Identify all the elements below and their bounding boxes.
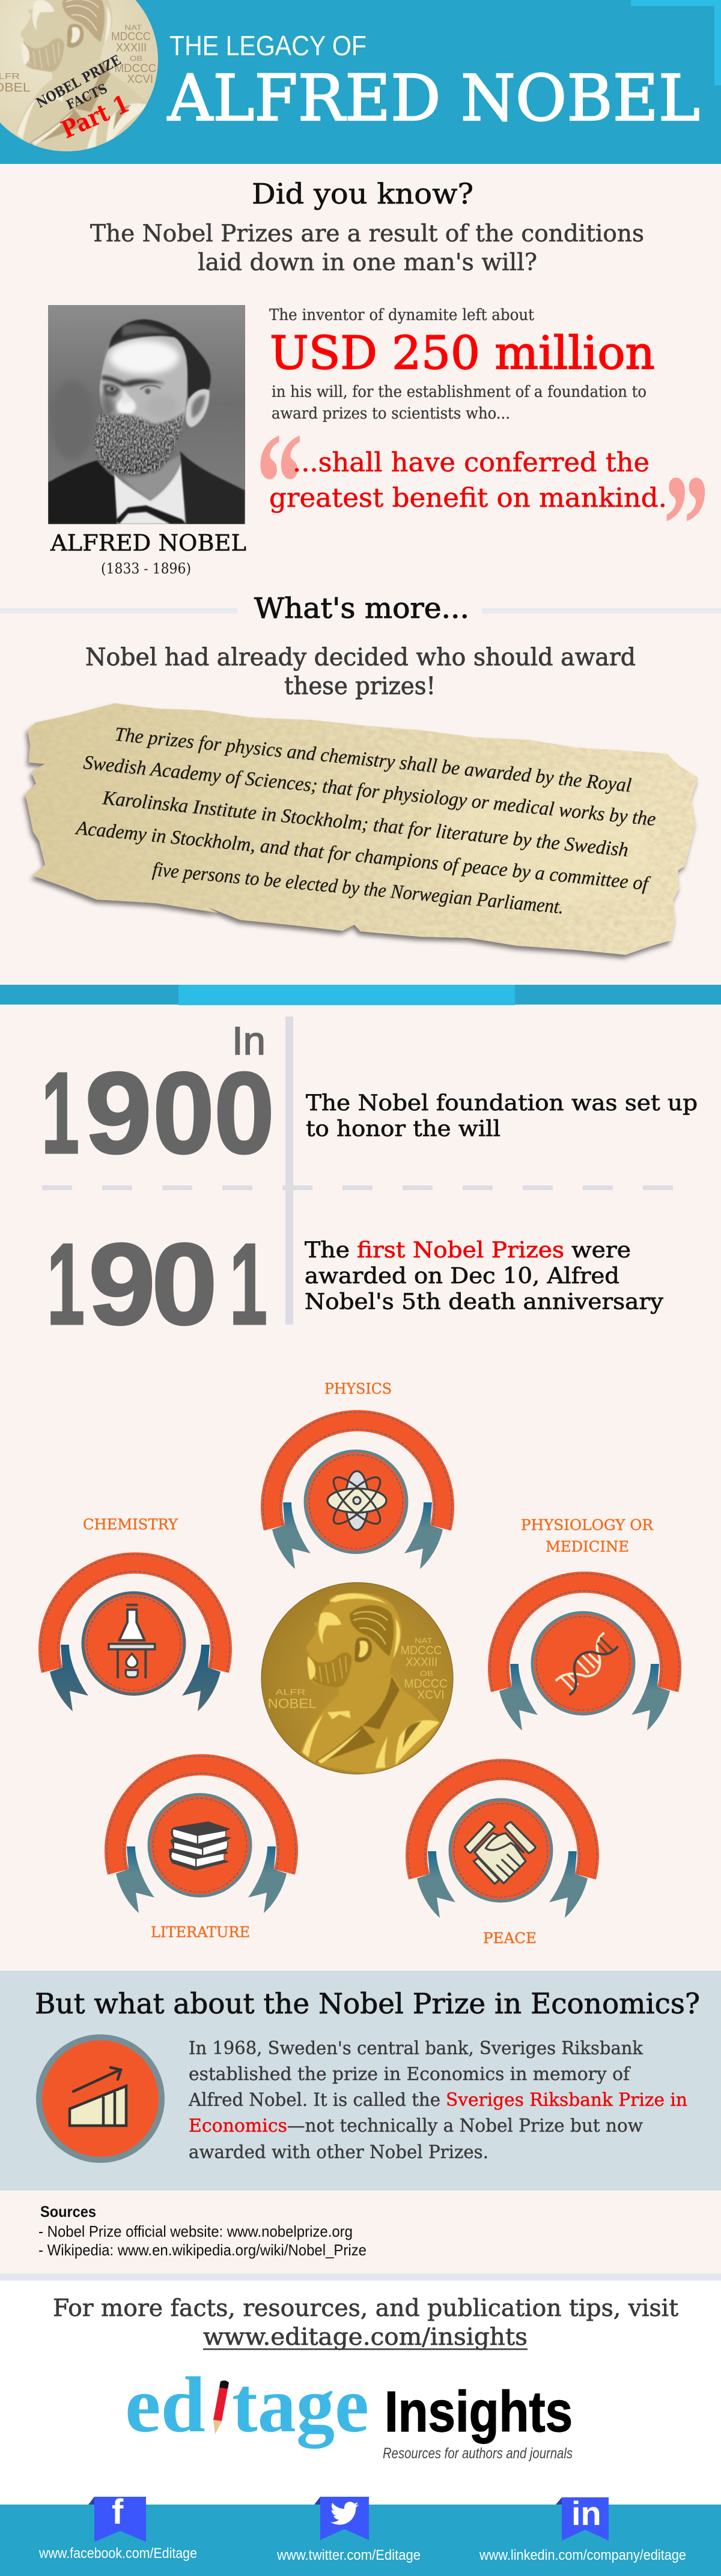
pull quote: greatest benefit on mankind. — [269, 483, 667, 513]
header medal badge: NAT — [124, 25, 142, 32]
economics text: —not technically a Nobel Prize but now — [287, 2115, 643, 2136]
badge: physiology or medicine — [488, 1571, 681, 1731]
pull quote: ...shall have conferred the — [293, 447, 650, 478]
footer links: www.facebook.com/Editage — [38, 2545, 197, 2562]
heading: did you know: Did you know? — [252, 178, 473, 211]
call to action — [53, 2295, 678, 2351]
economics text: established the prize in Economics in memory of — [189, 2064, 631, 2085]
logo: editage insights — [125, 2360, 573, 2462]
economics text: Sveriges Riksbank Prize in — [446, 2090, 687, 2111]
intro text — [90, 220, 644, 276]
portrait caption: ALFRED NOBEL — [50, 530, 246, 556]
icon: linkedin ribbon: in — [571, 2494, 601, 2532]
bequest text block: The inventor of dynamite left about — [269, 306, 535, 324]
intro text: The Nobel Prizes are a result of the conditions — [90, 220, 644, 247]
label: chemistry: CHEMISTRY — [83, 1516, 178, 1533]
gold medal: NOBEL — [268, 1696, 317, 1711]
badge: literature — [105, 1754, 298, 1913]
heading: economics: But what about the Nobel Prize in Economics? — [35, 1988, 700, 2021]
label: physiology or medicine: PHYSIOLOGY OR — [521, 1517, 654, 1534]
divider with heading: what's more: What's more... — [254, 592, 469, 625]
script text: Academy in Stockholm, and that for champions of peace by a committee of — [74, 817, 651, 895]
medal caption: part 1: Part 1 — [57, 89, 133, 144]
gold medal: OB — [420, 1669, 433, 1678]
header kicker: THE LEGACY OF — [169, 30, 367, 61]
label: peace: PEACE — [483, 1930, 537, 1947]
text: 1901 event: Nobel's 5th death anniversary — [305, 1290, 664, 1314]
logo: editage insights: ed — [125, 2360, 205, 2449]
subheading: who should award — [85, 644, 636, 700]
logo: editage insights: tage — [232, 2360, 369, 2449]
gold medal: MDCCC — [401, 1643, 442, 1657]
sources: - Wikipedia: www.en.wikipedia.org/wiki/Nobel_Prize — [38, 2241, 367, 2259]
medal caption: nobel prize facts: NOBEL PRIZE — [34, 52, 124, 111]
icon: DNA helix — [556, 1633, 618, 1695]
icon: linkedin ribbon — [556, 2494, 609, 2541]
icon: flask and burner — [109, 1604, 155, 1678]
economics text: Economics — [189, 2115, 287, 2136]
timeline — [41, 1017, 698, 1349]
call to action: For more facts, resources, and publication tips, visit — [53, 2295, 678, 2322]
gold medal: ALFR — [275, 1687, 305, 1696]
bequest text block — [269, 306, 655, 423]
header medal badge: XXXIII — [116, 41, 147, 54]
economics text: Alfred Nobel. It is called the — [188, 2090, 440, 2111]
badge: peace — [406, 1759, 599, 1918]
portrait caption — [50, 530, 246, 577]
sources: - Nobel Prize official website: www.nobelprize.org — [38, 2222, 353, 2240]
pull quote — [256, 403, 709, 605]
badge: physics — [261, 1410, 454, 1569]
sources: Sources — [40, 2203, 96, 2221]
portrait of Alfred Nobel — [48, 305, 245, 524]
amount callout: USD 250 million — [270, 326, 655, 379]
label: literature: LITERATURE — [151, 1924, 250, 1941]
icon: stack of books — [169, 1821, 231, 1870]
header medal badge — [0, 0, 158, 154]
logo: editage insights: Insights — [385, 2380, 573, 2444]
medal caption: facts: FACTS — [64, 80, 110, 113]
script text: Swedish Academy of Sciences; that for physiology or medical works by the — [82, 752, 657, 830]
year: 1901: 1 — [47, 1219, 85, 1349]
gold medal: XXXIII — [406, 1655, 437, 1669]
year: in 1900: 0 — [153, 1048, 214, 1178]
logo: editage insights: Resources for authors and journals — [383, 2445, 573, 2462]
year: in 1900: 1 — [41, 1048, 79, 1178]
call to action: www.editage.com/insights — [203, 2324, 528, 2351]
icon: facebook ribbon: f — [112, 2493, 124, 2532]
economics text: awarded with other Nobel Prizes. — [189, 2142, 488, 2163]
script text — [74, 724, 657, 918]
text: 1900 event: to honor the will — [306, 1117, 500, 1141]
text: 1901 event: awarded on Dec 10, Alfred — [305, 1264, 619, 1289]
gold medal: NAT — [415, 1637, 433, 1645]
parchment with will excerpt — [25, 703, 698, 955]
icon: opening quote mark: “ — [256, 403, 303, 563]
economics text: In 1968, Sweden's central bank, Sveriges Riksbank — [189, 2038, 643, 2059]
gold medal: MDCCC — [404, 1677, 448, 1690]
icon: pencil — [213, 2380, 229, 2434]
header medal badge: MDCCC — [111, 30, 151, 43]
portrait caption: (1833 - 1896) — [101, 560, 191, 577]
gold medal: XCVI — [417, 1688, 445, 1702]
year: 1901: 0 — [151, 1219, 218, 1349]
subheading: who should award: these prizes! — [284, 673, 436, 700]
year: in 1900: In — [232, 1018, 266, 1063]
sources — [38, 2203, 367, 2259]
icon: growth chart — [39, 2037, 162, 2160]
footer links: www.twitter.com/Editage — [276, 2547, 421, 2563]
intro text: laid down in one man's will? — [198, 249, 537, 276]
year: in 1900: 0 — [214, 1048, 275, 1178]
year: in 1900: 9 — [85, 1048, 152, 1178]
icon: atom — [327, 1471, 386, 1530]
icon: twitter ribbon — [314, 2497, 369, 2540]
text: 1901 event: were — [571, 1238, 631, 1263]
footer links: www.linkedin.com/company/editage — [479, 2547, 686, 2563]
year: 1901: 9 — [88, 1219, 156, 1349]
icon: facebook ribbon — [88, 2493, 146, 2542]
bottom white area — [0, 2273, 721, 2281]
header medal badge: OB — [130, 55, 143, 62]
text: 1901 event — [305, 1238, 664, 1314]
panel: economics — [0, 1971, 721, 2191]
year: 1901: 1 — [230, 1219, 267, 1349]
label: physiology or medicine — [521, 1517, 654, 1555]
script text: five persons to be elected by the Norwegian Parliament. — [151, 859, 565, 918]
header medal badge: MDCCC — [114, 62, 156, 75]
gold medal — [261, 1583, 453, 1774]
icon: handshake — [464, 1822, 535, 1884]
label: physiology or medicine: MEDICINE — [546, 1538, 629, 1555]
header medal badge: XCVI — [127, 73, 153, 86]
economics text — [188, 2038, 687, 2163]
divider with heading: what's more — [0, 592, 721, 625]
bequest text block: award prizes to scientists who... — [272, 405, 510, 423]
year: 1901 — [47, 1219, 267, 1349]
script text: The prizes for physics and chemistry shall be awarded by the Royal — [114, 724, 633, 797]
script text: Karolinska Institute in Stockholm; that for literature by the Swedish — [101, 787, 629, 861]
subheading: who should award: Nobel had already decided who should award — [85, 644, 636, 671]
section band — [0, 985, 721, 1005]
text: 1900 event: The Nobel foundation was set up — [306, 1091, 698, 1116]
text: 1901 event: The — [305, 1238, 350, 1263]
footer links — [38, 2545, 686, 2563]
badge: chemistry — [38, 1552, 232, 1711]
header banner — [0, 0, 721, 164]
bequest text block: in his will, for the establishment of a foundation to — [272, 383, 646, 401]
label: physics: PHYSICS — [324, 1380, 392, 1397]
text: 1901 event: first Nobel Prizes — [357, 1238, 564, 1263]
footer band — [0, 2493, 721, 2576]
header title: ALFRED NOBEL — [167, 61, 700, 135]
year: in 1900 — [41, 1018, 275, 1178]
text: 1900 event — [306, 1091, 698, 1141]
